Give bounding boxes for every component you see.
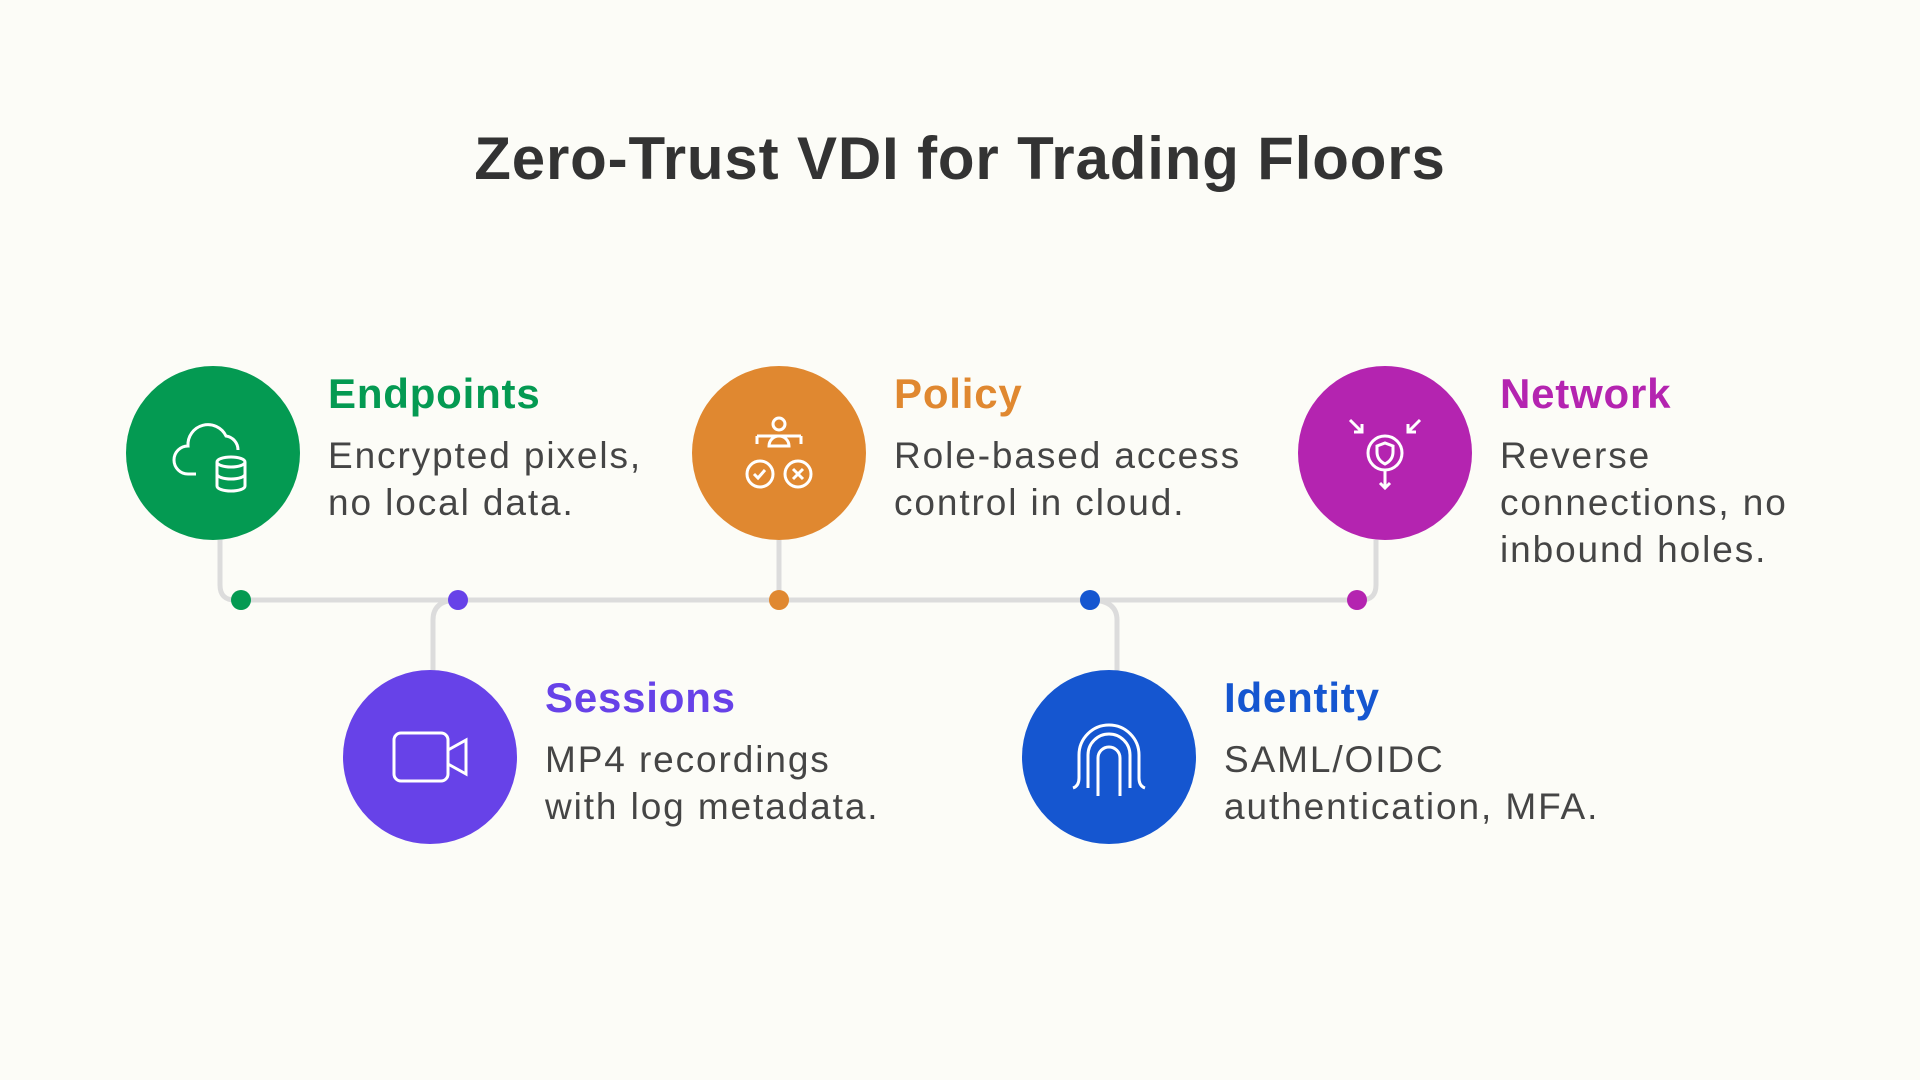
text: [894, 435, 1241, 523]
heading: Policy: [894, 370, 1023, 417]
panel: network: [1298, 366, 1788, 570]
text: connections, no: [1500, 482, 1788, 523]
panel: policy: [692, 366, 1241, 540]
text: Reverse: [1500, 435, 1651, 476]
panel: sessions: [343, 670, 879, 844]
heading: Identity: [1224, 674, 1380, 721]
text: MP4 recordings: [545, 739, 831, 780]
text: [1500, 435, 1788, 570]
icon: fingerprint: [1022, 670, 1196, 844]
text: [328, 435, 642, 523]
text: authentication, MFA.: [1224, 786, 1599, 827]
text: Role-based access: [894, 435, 1241, 476]
text: no local data.: [328, 482, 575, 523]
text: [545, 739, 879, 827]
title: Zero-Trust VDI for Trading Floors: [474, 125, 1446, 192]
heading: Network: [1500, 370, 1671, 417]
text: control in cloud.: [894, 482, 1185, 523]
text: [1224, 739, 1599, 827]
text: inbound holes.: [1500, 529, 1767, 570]
text: Encrypted pixels,: [328, 435, 642, 476]
icon: network shield: [1298, 366, 1472, 540]
icon: policy: [692, 366, 866, 540]
panel: identity: [1022, 670, 1599, 844]
dots: [231, 590, 1367, 610]
text: with log metadata.: [545, 786, 879, 827]
heading: Endpoints: [328, 370, 541, 417]
text: SAML/OIDC: [1224, 739, 1445, 780]
icon: video camera: [343, 670, 517, 844]
heading: Sessions: [545, 674, 736, 721]
icon: cloud database: [126, 366, 300, 540]
panel: endpoints: [126, 366, 642, 540]
